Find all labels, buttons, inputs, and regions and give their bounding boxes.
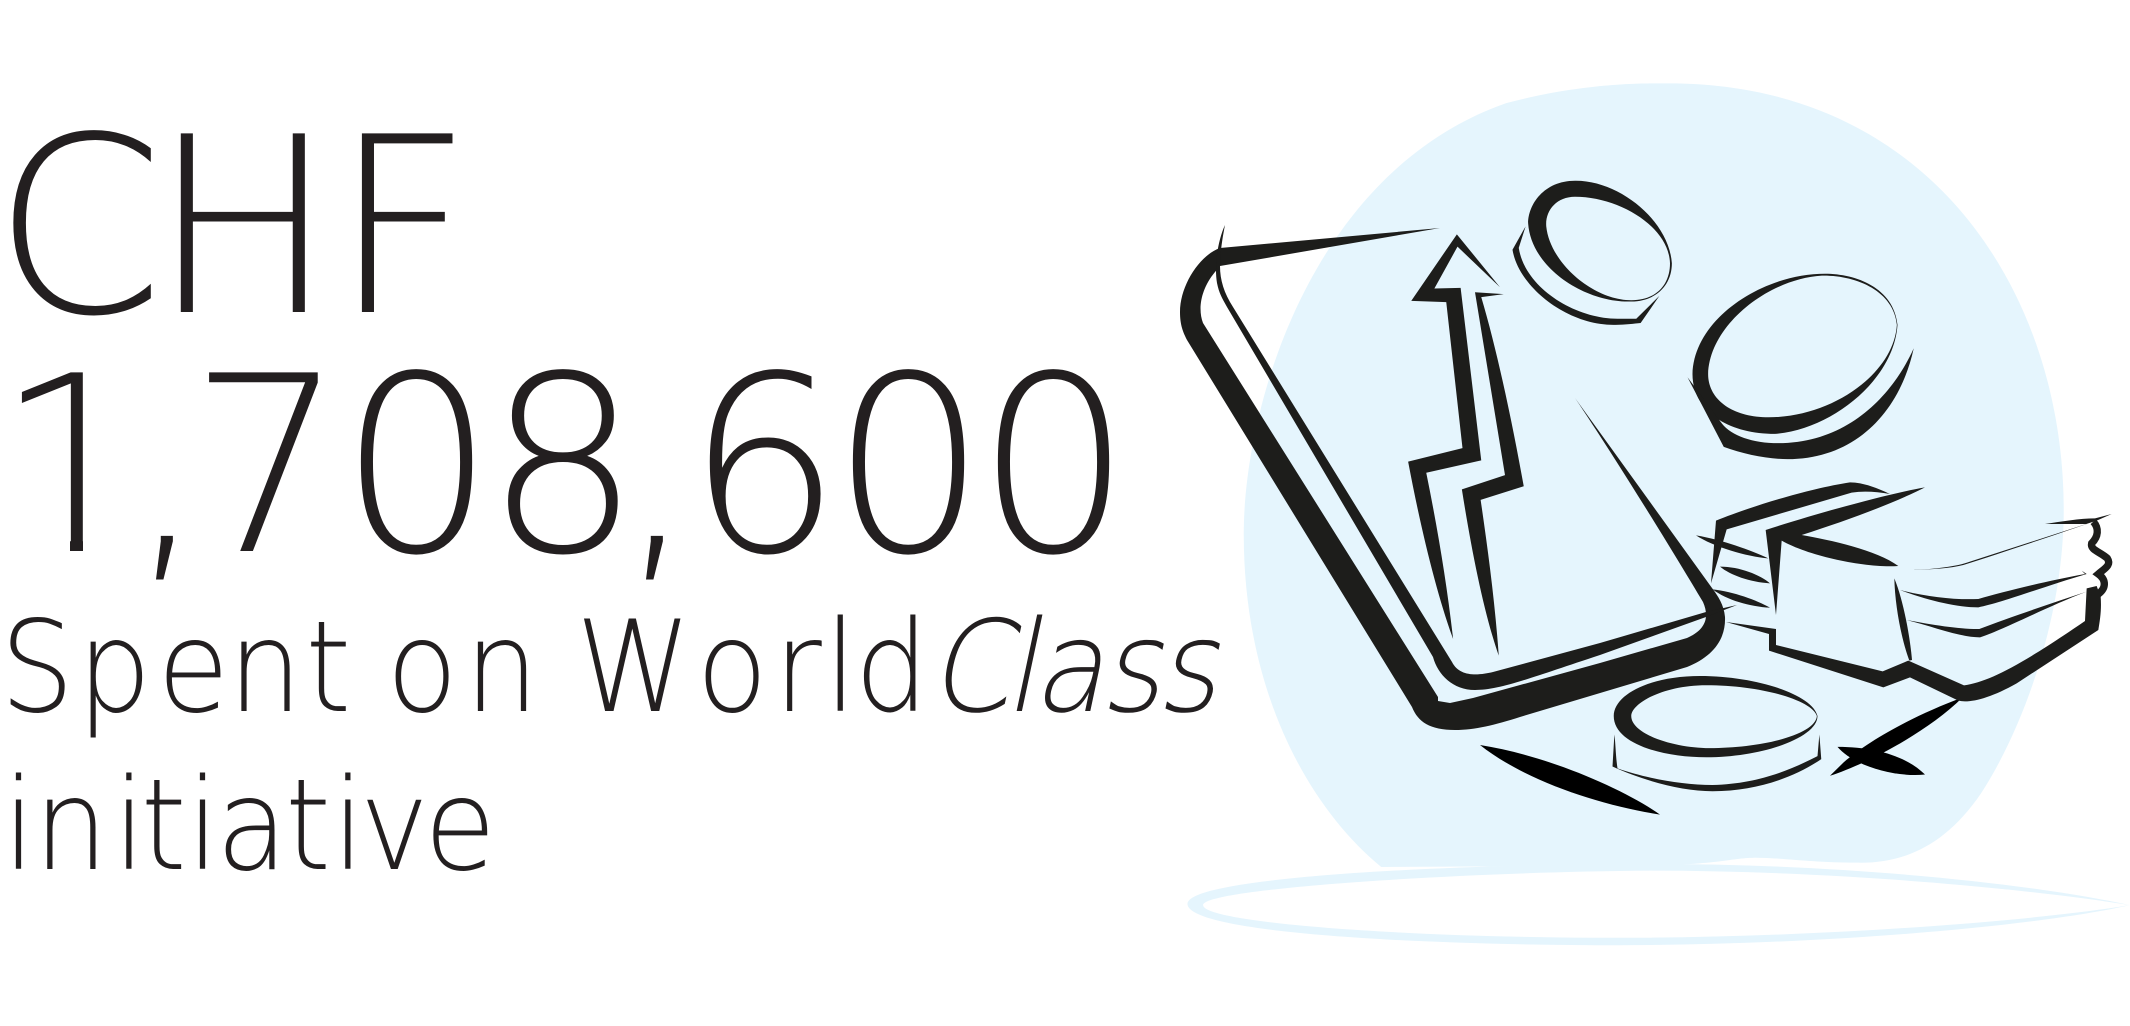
coin top: [1512, 181, 1672, 325]
stack right edge wiggle: [2091, 522, 2109, 594]
floor ring: [1188, 864, 2130, 945]
note front face outline: [1766, 487, 1925, 615]
tablet inner line: [1216, 225, 1737, 690]
icon: arrow and coins: [1408, 181, 1962, 815]
coin right: [1688, 274, 1914, 459]
illustration background and floor ring: [1188, 83, 2130, 945]
heading: CHF: CHF: [0, 85, 473, 370]
note top edge: [1711, 482, 1890, 583]
note layers: [1894, 514, 2112, 661]
stack base: [1726, 586, 2101, 701]
leaf strokes below: [1480, 698, 1962, 815]
heading: amount: 1,708,600: [0, 324, 1132, 609]
light blue blob: [1244, 83, 2064, 867]
short dashes: [1696, 535, 1770, 608]
caption line 1: Spent on World: [0, 593, 929, 741]
growth arrow right stroke: [1462, 292, 1524, 656]
growth arrow left stroke: [1408, 234, 1500, 639]
icon: stack of banknotes: [1696, 482, 2112, 701]
caption line 2: initiative: [3, 751, 496, 899]
coin bottom: [1612, 676, 1821, 791]
tablet outer frame: [1180, 228, 1725, 730]
caption line 1: Class: [921, 594, 1242, 742]
